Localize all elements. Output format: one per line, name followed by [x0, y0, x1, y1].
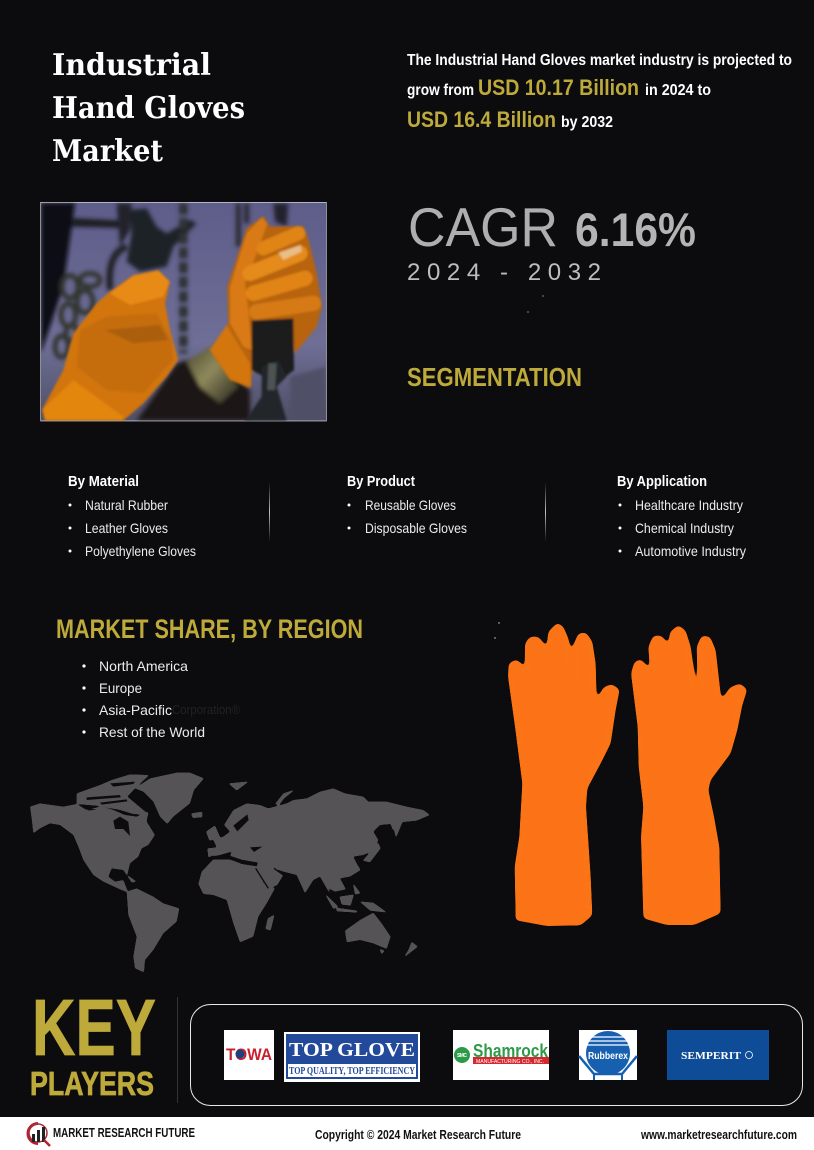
title: Market [52, 134, 163, 169]
segment: by material: By Material [68, 473, 139, 490]
logo: Towa [224, 1030, 274, 1080]
logo: Rubberex: Rubberex [588, 1051, 628, 1062]
market forecast text: by 2032 [561, 114, 613, 131]
region list: Rest of the World [99, 724, 205, 740]
logo: Towa: TOWA [226, 1045, 272, 1064]
footer bar: MARKET RESEARCH FUTURE [53, 1125, 195, 1140]
market forecast text: in 2024 to [645, 82, 711, 99]
segment: by material: Leather Gloves [85, 520, 168, 536]
market forecast text: grow from [407, 82, 474, 99]
segment: by product [347, 473, 467, 536]
CAGR value [408, 196, 696, 258]
title: Hand Gloves [52, 91, 245, 126]
logo: Semperit [667, 1030, 769, 1080]
segment: by material: Natural Rubber [85, 497, 168, 513]
segment: by application: Chemical Industry [635, 520, 734, 536]
segment: by application: Automotive Industry [635, 543, 746, 559]
region list: North America [99, 658, 188, 674]
segment: by application [617, 473, 746, 559]
logo: Top Glove: TOP GLOVE [289, 1039, 415, 1061]
logo: Shamrock: MANUFACTURING CO., INC. [476, 1059, 544, 1065]
logo: Top Glove: TOP QUALITY, TOP EFFICIENCY [289, 1066, 416, 1077]
CAGR value: CAGR [408, 196, 558, 258]
key players panel [190, 1004, 802, 1106]
title [52, 48, 245, 169]
title: Industrial [52, 48, 211, 83]
segment: by product: Reusable Gloves [365, 497, 456, 513]
logo: Shamrock: Shamrock [473, 1041, 549, 1061]
region list [82, 658, 240, 740]
key players heading: KEY [32, 983, 156, 1072]
market forecast text: USD 10.17 Billion [478, 75, 639, 100]
CAGR value: 6.16% [575, 203, 696, 256]
logo: Top Glove [284, 1032, 420, 1082]
segment: by material [68, 473, 196, 559]
world map [30, 773, 430, 972]
market forecast text [407, 52, 792, 132]
segment: by product: Disposable Gloves [365, 520, 467, 536]
region list: Europe [99, 680, 142, 696]
key players heading: PLAYERS [30, 1065, 154, 1102]
logo: Shamrock: SMC [457, 1053, 467, 1059]
segment: by product: By Product [347, 473, 415, 490]
forecast period: 2024 - 2032 [407, 259, 601, 286]
segment: by material: Polyethylene Gloves [85, 543, 196, 559]
logo: Rubberex [579, 1030, 637, 1080]
market forecast text: USD 16.4 Billion [407, 107, 556, 132]
region list: Corporation® [172, 702, 240, 717]
icon: pair of orange gloves [508, 623, 747, 926]
photo: orange gloved hands gripping chain [40, 202, 327, 421]
segment: by application: Healthcare Industry [635, 497, 743, 513]
segment: by application: By Application [617, 473, 707, 490]
market share heading: MARKET SHARE, BY REGION [56, 614, 363, 644]
footer bar: Copyright © 2024 Market Research Future [315, 1127, 521, 1142]
segmentation heading: SEGMENTATION [407, 362, 582, 392]
icon: market research future logo [28, 1124, 50, 1146]
region list: Asia-Pacific [99, 702, 172, 718]
footer bar [0, 1117, 814, 1150]
logo: Shamrock [453, 1030, 549, 1080]
logo: Semperit: SEMPERIT [681, 1050, 742, 1062]
key players heading [30, 983, 156, 1102]
